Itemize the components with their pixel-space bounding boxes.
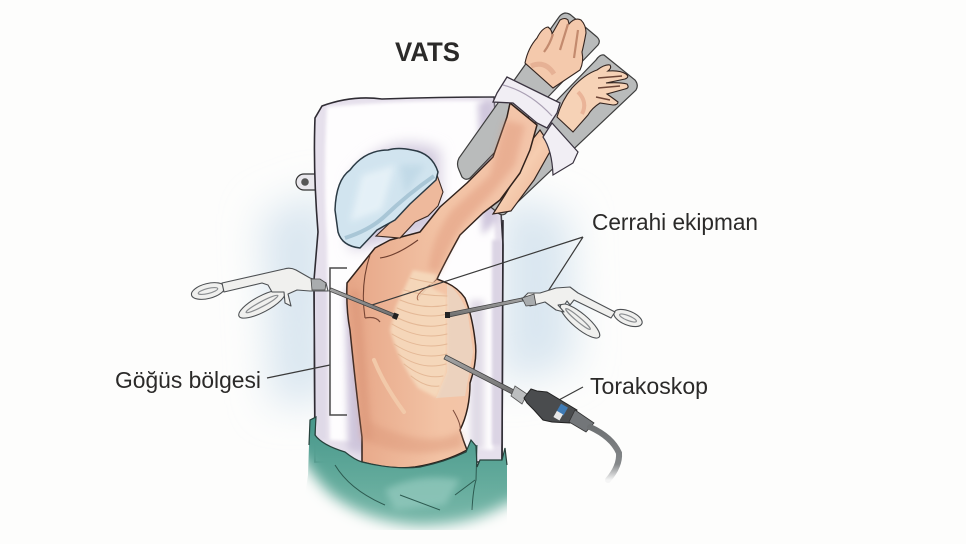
wrist strap: lower [543,123,578,175]
leader: chest region [267,365,330,378]
label: Cerrahi ekipman: Cerrahi ekipman [592,209,758,235]
rib cage overlay [374,270,473,412]
patient far arm [493,130,552,214]
hand: upper [525,18,586,88]
thoracoscope [444,355,619,480]
surgical drape [300,417,507,530]
arm board: lower [470,55,637,215]
right surgical instrument [445,287,645,343]
title: VATS [395,37,460,67]
wrist strap: upper [493,77,560,128]
leader: thoracoscope [557,387,583,401]
surgical cap [335,148,438,248]
thoracoscope body [524,389,577,423]
patient torso and near arm [347,103,537,468]
label: Göğüs bölgesi: Göğüs bölgesi [115,367,261,393]
bed side knob [296,174,318,190]
left surgical instrument [190,268,399,323]
infographic: VATS illustration [116,12,756,530]
label: leader lines [267,237,583,401]
chest region bracket [330,268,347,415]
blue glow behind the bed [262,190,575,405]
label: Torakoskop: Torakoskop [590,373,708,399]
thoracoscope cable [590,427,619,480]
operating bed with pillow [296,97,503,462]
hand: lower palm [557,65,628,132]
arm board: upper [458,13,599,179]
face [376,175,443,238]
leader: surgical equipment [372,237,583,305]
muscle shading on shoulder and arm [350,120,525,453]
